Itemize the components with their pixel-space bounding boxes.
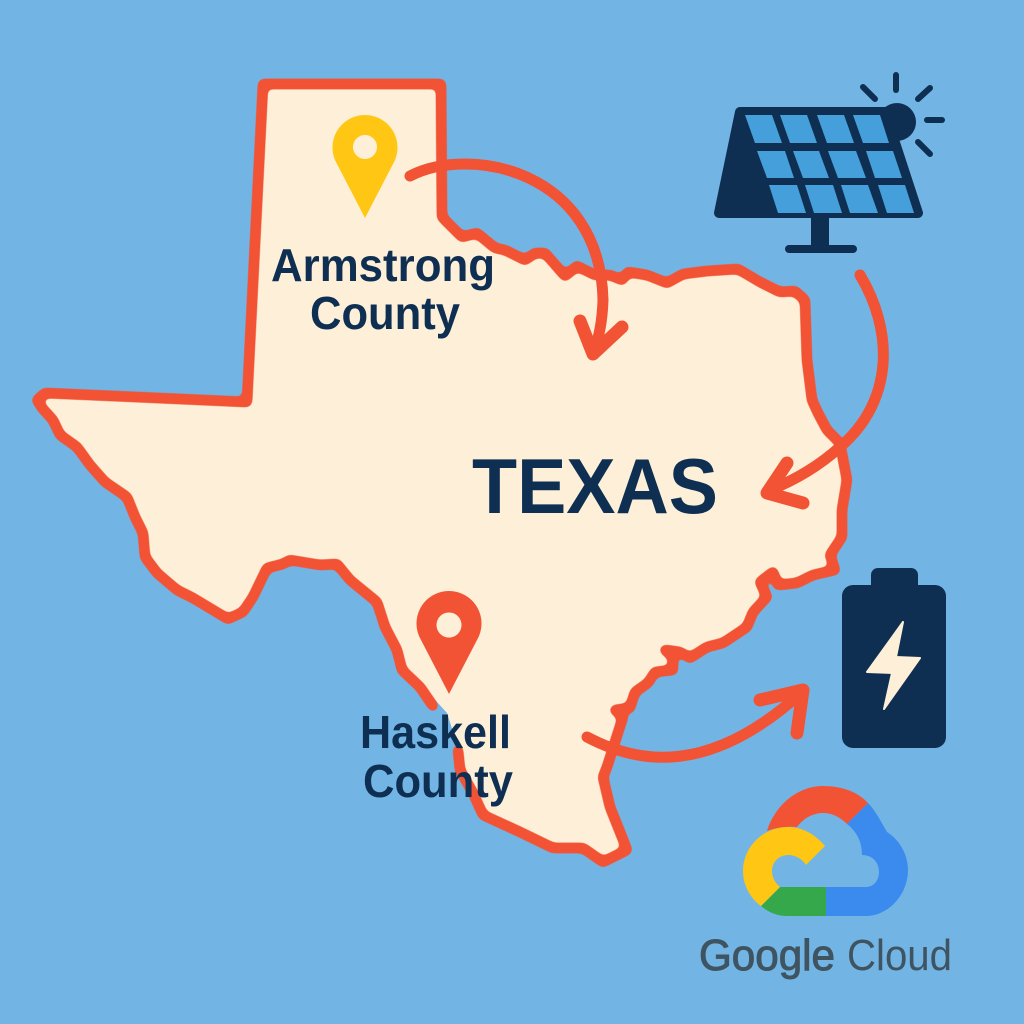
icon: red map pin [416, 591, 482, 694]
arrow: Armstrong pin to Texas [410, 164, 622, 354]
label: Haskell County: Haskell [360, 706, 511, 758]
label: TEXAS: TEXAS [472, 442, 718, 530]
logo: Google Cloud [699, 786, 952, 980]
icon: solar panel [719, 75, 942, 253]
label: Armstrong County: Armstrong [271, 239, 495, 291]
arrow: Texas to battery [587, 690, 803, 757]
map: Texas [37, 84, 847, 862]
label: Haskell County: County [363, 755, 513, 807]
icon: yellow map pin [333, 115, 398, 218]
label: Armstrong County: County [310, 287, 460, 339]
label: Haskell County [360, 706, 513, 807]
logo: Google Cloud: Cloud [847, 931, 952, 980]
arrow: solar panel to Texas [767, 275, 883, 503]
icon: battery [842, 568, 946, 748]
logo: Google Cloud: Google [699, 931, 835, 980]
label: Armstrong County [271, 239, 495, 339]
